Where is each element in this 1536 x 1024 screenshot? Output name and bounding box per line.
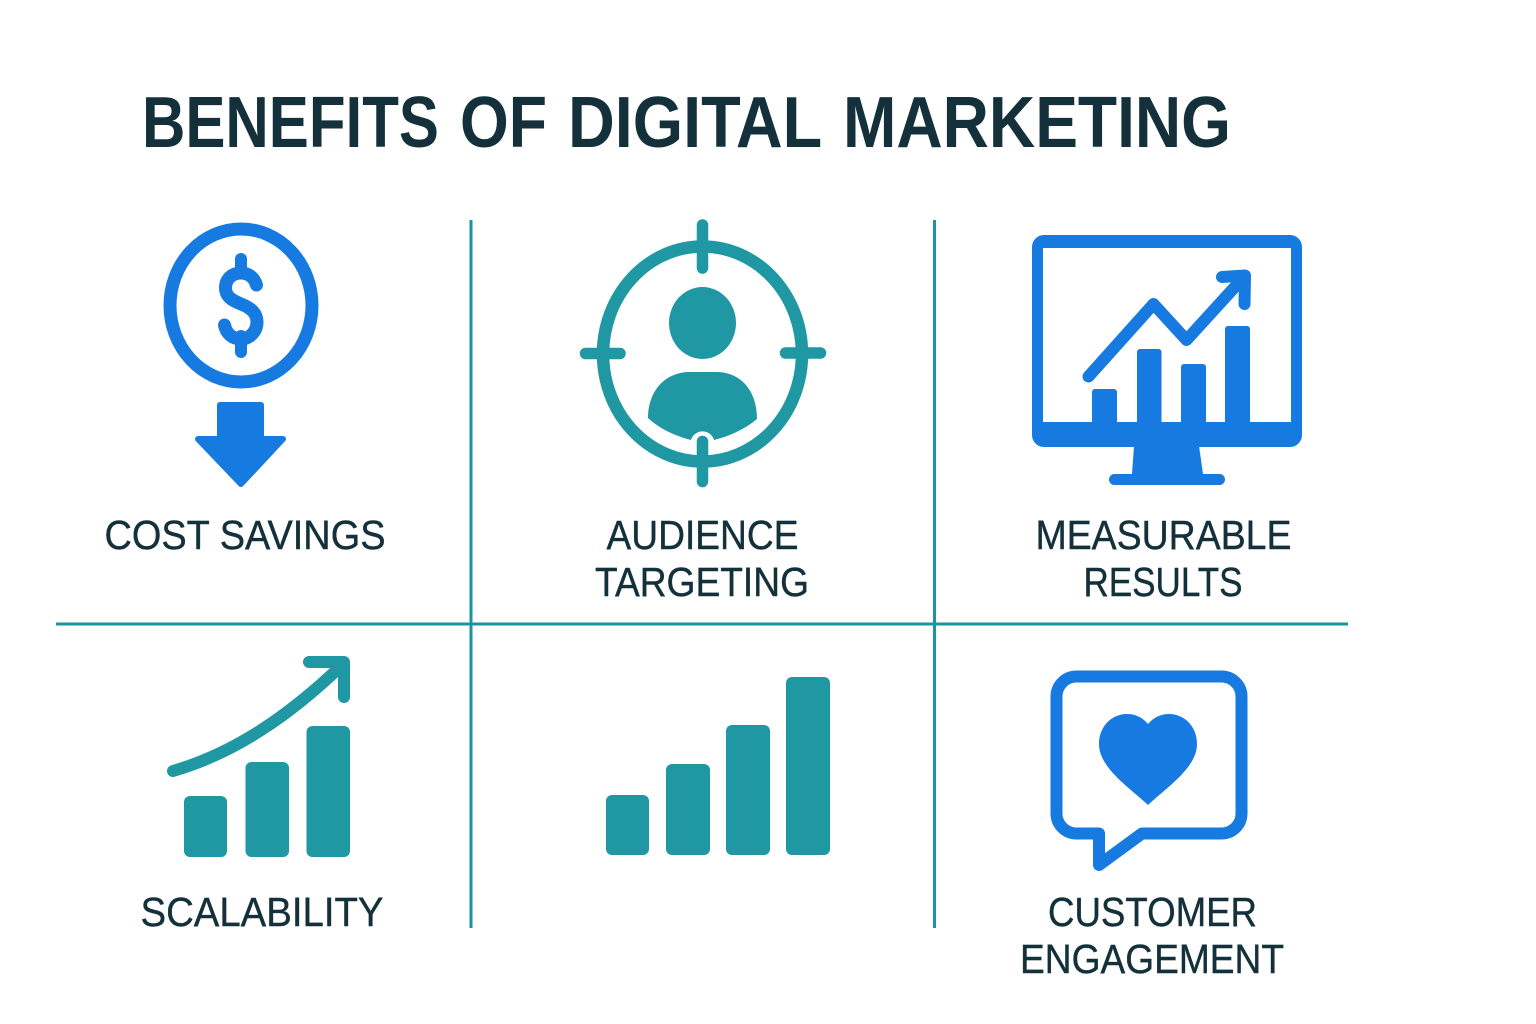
- label: measurable results: MEASURABLE: [1036, 512, 1292, 558]
- label: audience targeting: TARGETING: [595, 559, 809, 605]
- label: customer engagement: CUSTOMER: [1048, 889, 1257, 935]
- label: customer engagement: [1020, 889, 1284, 982]
- label: cost savings: COST SAVINGS: [104, 512, 386, 558]
- label: measurable results: [1036, 512, 1292, 605]
- title: DIGITAL: [568, 83, 821, 163]
- label: measurable results: RESULTS: [1084, 559, 1242, 605]
- icon: customer engagement: [1056, 676, 1242, 865]
- title: MARKETING: [843, 83, 1231, 163]
- label: customer engagement: ENGAGEMENT: [1020, 936, 1284, 982]
- label: audience targeting: [595, 512, 809, 605]
- icon: bar chart: [606, 677, 830, 855]
- icon: scalability: [173, 662, 350, 857]
- icon: cost savings: [170, 229, 312, 484]
- title: BENEFITS: [142, 83, 439, 163]
- icon: measurable results: [1032, 235, 1302, 485]
- label: scalability: SCALABILITY: [140, 889, 384, 935]
- title: OF: [460, 83, 547, 163]
- label: audience targeting: AUDIENCE: [606, 512, 798, 558]
- icon: audience targeting: [586, 225, 820, 482]
